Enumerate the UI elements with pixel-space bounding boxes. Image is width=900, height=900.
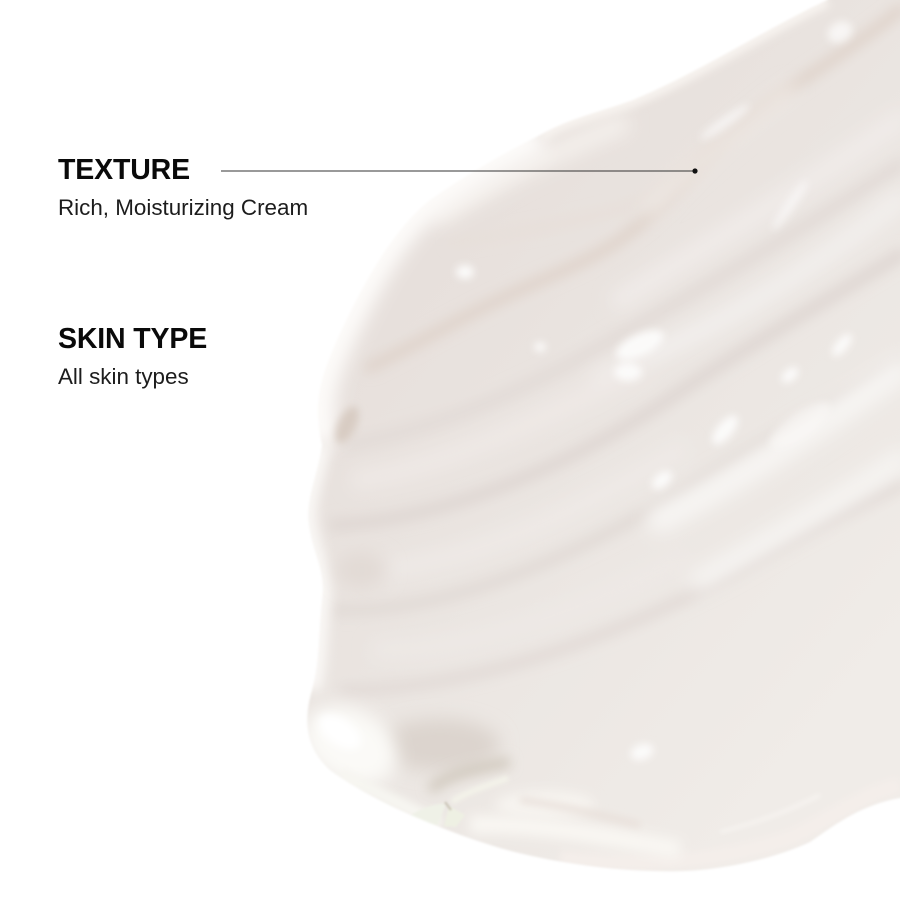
heading: skin type: SKIN TYPE	[58, 323, 207, 355]
greenish fold	[416, 805, 444, 822]
base	[307, 0, 900, 872]
leader line	[221, 168, 698, 174]
cream swatch	[221, 0, 900, 872]
highlight bands	[448, 88, 900, 590]
pale outer rim, upper left	[318, 135, 540, 445]
bottom ridge after fold	[470, 825, 680, 850]
text: texture description: Rich, Moisturizing Cream	[58, 195, 308, 220]
soft shadow bands	[335, 10, 900, 690]
heading: texture: TEXTURE	[58, 154, 190, 186]
text: skin type description: All skin types	[58, 364, 189, 389]
bright bottom rim	[560, 785, 900, 863]
lobe at bottom left	[308, 703, 402, 782]
warm shadow at left edge	[332, 406, 360, 444]
specular glints	[456, 17, 856, 764]
shadow above bottom lobe	[380, 719, 500, 771]
